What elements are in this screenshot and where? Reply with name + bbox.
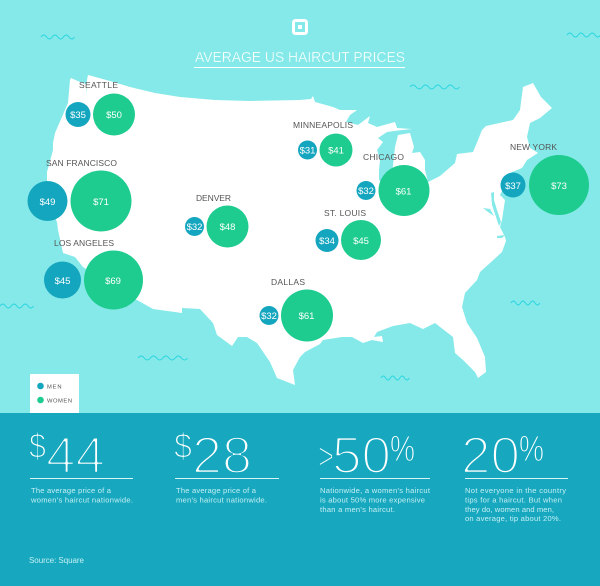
city: New York xyxy=(500,142,589,215)
stat: 20%: they do, women and men, xyxy=(465,505,554,514)
city: Chicago: $61 xyxy=(396,186,411,198)
city: Denver xyxy=(185,193,248,248)
city: Denver: $32 xyxy=(187,222,202,233)
stat: $28: The average price of a xyxy=(176,486,257,495)
city: Minneapolis xyxy=(293,120,353,166)
city: St. Louis: ST. LOUIS xyxy=(324,208,366,218)
decorative waves xyxy=(0,33,600,380)
stat: $28: 28 xyxy=(192,427,252,485)
stat: >50%: 50 xyxy=(332,427,391,485)
city: New York: $73 xyxy=(551,181,567,192)
city: Dallas: $32 xyxy=(261,311,277,322)
city: Seattle: SEATTLE xyxy=(79,80,118,90)
legend: MEN xyxy=(47,384,62,390)
city: Los Angeles: $45 xyxy=(55,276,70,287)
stat: >50%: than a men's haircut. xyxy=(320,505,395,514)
city: St. Louis: $45 xyxy=(353,236,369,247)
city: Minneapolis: $31 xyxy=(300,146,315,156)
city: Seattle: $35 xyxy=(70,110,86,121)
city: Chicago: CHICAGO xyxy=(363,152,404,162)
map of the United States xyxy=(47,75,552,385)
stat: $44 xyxy=(29,427,133,504)
stat: 20%: 20 xyxy=(461,427,520,485)
stat: >50%: is about 50% more expensive xyxy=(320,496,425,504)
city: Dallas: $61 xyxy=(299,311,314,322)
stat: $28: men's haircut nationwide. xyxy=(176,496,267,504)
city: Minneapolis: $41 xyxy=(328,146,344,156)
stat: $28 xyxy=(174,427,279,504)
stat: >50%: % xyxy=(390,428,415,469)
stat: $44: The average price of a xyxy=(31,486,112,495)
city: Los Angeles xyxy=(44,238,143,310)
city: Los Angeles: $69 xyxy=(105,276,121,287)
city: Chicago: $32 xyxy=(358,186,374,197)
legend xyxy=(30,374,79,413)
source note: Source: Square xyxy=(29,556,85,565)
bottom panel xyxy=(0,413,600,586)
stat: 20%: Not everyone in the country xyxy=(465,486,566,495)
city: New York: NEW YORK xyxy=(510,142,557,152)
legend: WOMEN xyxy=(47,398,72,404)
city: Chicago xyxy=(356,152,430,216)
icon: square logo xyxy=(294,20,306,34)
stat: 20%: tips for a haircut. But when xyxy=(465,496,562,504)
stat: >50% xyxy=(318,427,431,514)
city: San Francisco: $49 xyxy=(40,197,55,208)
city: Los Angeles: LOS ANGELES xyxy=(54,238,114,248)
city: Dallas: DALLAS xyxy=(271,277,305,287)
city: Minneapolis: MINNEAPOLIS xyxy=(293,120,353,130)
stat: 20%: % xyxy=(519,428,544,469)
city: New York: $37 xyxy=(505,181,521,192)
city: St. Louis: $34 xyxy=(319,236,335,247)
stat: 20%: on average, tip about 20%. xyxy=(465,514,561,523)
city: Seattle: $50 xyxy=(106,110,122,121)
stat: >50%: > xyxy=(318,436,334,478)
city: San Francisco: $71 xyxy=(93,197,109,208)
city: San Francisco: SAN FRANCISCO xyxy=(46,158,117,168)
city: Seattle xyxy=(66,80,135,136)
stat: $44: $ xyxy=(29,427,46,466)
city: St. Louis xyxy=(316,208,381,260)
stat: $28: $ xyxy=(174,427,192,466)
stat: $44: 44 xyxy=(46,427,105,485)
stat: $44: women's haircut nationwide. xyxy=(30,496,133,504)
city: Denver: DENVER xyxy=(196,193,231,203)
city: Denver: $48 xyxy=(220,222,235,233)
city: Dallas xyxy=(260,277,333,342)
title: AVERAGE US HAIRCUT PRICES xyxy=(195,49,405,66)
stat: 20% xyxy=(461,427,568,523)
stat: >50%: Nationwide, a women's haircut xyxy=(320,486,431,495)
city: San Francisco xyxy=(28,158,132,232)
